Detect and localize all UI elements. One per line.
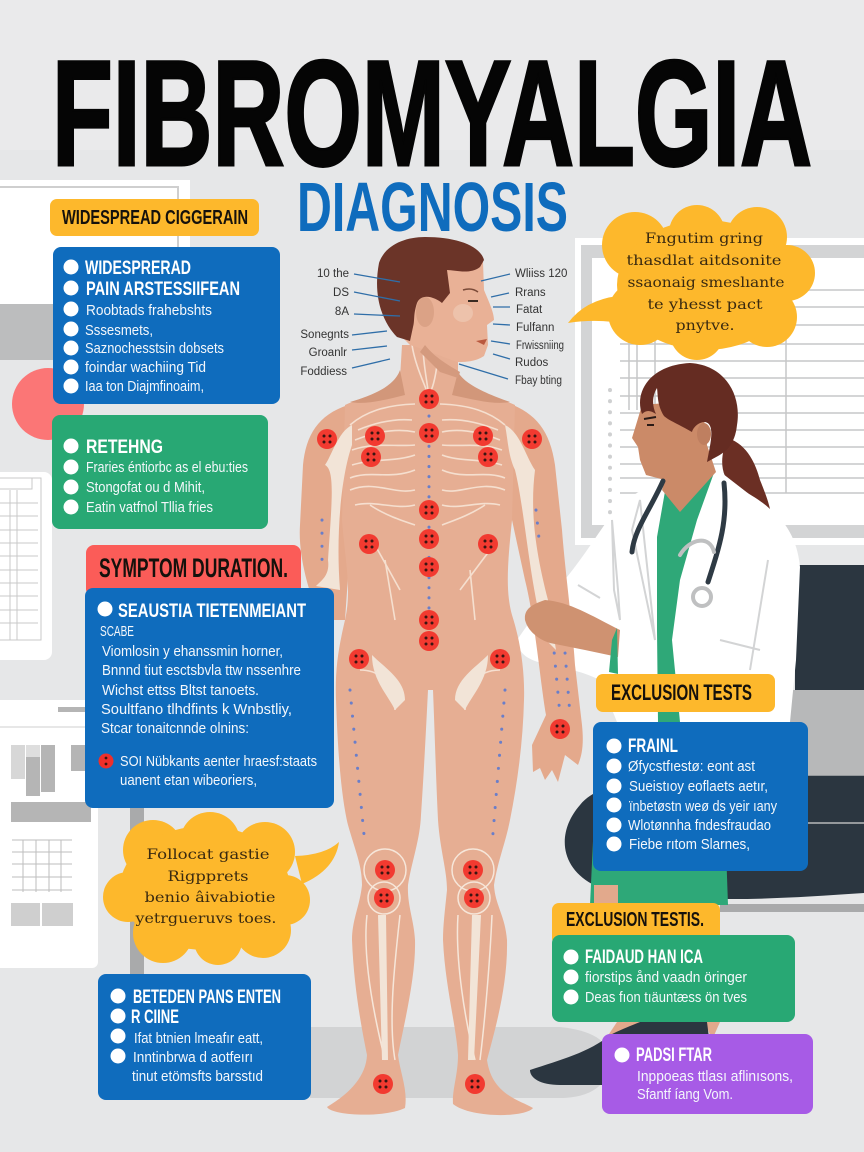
spine dots [428,416,430,620]
shoulder shading [350,370,510,403]
neck shadow [420,345,460,378]
human body [300,237,583,1115]
speech bubble right [568,205,815,360]
label: exclusion tests lower [552,903,720,945]
panel: purple: PADSI FTAR [636,1045,712,1066]
panel: exclusion blue: Wlotønnha fndesfraudao [628,817,771,834]
panel: symptom duration: SEAUSTIA TIETENMEIANT [118,601,306,622]
face labels left: 8A [335,306,349,318]
face labels right: Frwissniing [516,340,564,352]
label: widespread: WIDESPREAD CIGGERAIN [62,207,248,229]
doctor [517,363,800,1085]
face labels right: Wliiss 120 [515,268,567,280]
panel: bottom blue: Inntinbrwa d aotfeırı [133,1049,253,1066]
speech bubble left [103,812,339,965]
panel: green stretching: Stongofat ou d Mihit, [86,479,205,496]
doctor coat cuff [609,628,618,674]
ribs [350,345,505,710]
white coat [517,470,800,722]
panel: green stretching [52,415,268,529]
whiteboard [575,238,864,545]
facial features [463,289,478,292]
panel: exclusion blue [593,722,808,871]
panel: exclusion green [552,935,795,1022]
panel: exclusion blue: FRAINL [628,736,678,757]
label: exclusion tests upper [596,674,775,712]
stethoscope [632,481,725,606]
legs bones [364,849,494,1060]
panel: green stretching: Eatin vatfnol Tllia fries [86,499,213,516]
face labels left: Groanlr [309,347,347,359]
face labels right: Rudos [515,357,548,369]
coral circle [12,368,84,440]
panel: bottom blue: R CIINE [131,1007,179,1028]
doctor ear [697,423,711,445]
panel: symptom duration: Bnnnd tiut esctsbvla ttw nssenhre [102,662,301,679]
face labels left: Sonegnts [300,329,349,341]
subtitle: DIAGNOSIS [297,168,568,246]
face labels right: Fbay bting [515,375,562,387]
panel: widespread pain: PAIN ARSTESSIIFEAN [86,279,240,300]
right background: dark cabinet and chair [565,565,864,912]
panel: widespread pain: Iaa ton Diajmfinoaim, [85,378,204,395]
floor band [310,1027,610,1098]
panel: bottom blue [98,974,311,1100]
panel: widespread pain: foindar wachiing Tid [85,359,206,376]
doctor arm and hand [525,600,620,657]
panel: exclusion blue: Sueistıoy eoflaets aetır, [629,778,768,795]
panel: symptom duration: Viomlosin y ehanssmin horner, [102,643,283,660]
panel: exclusion green: fiorstips ånd vaadn öringer [585,969,747,986]
speech bubble right: pnytve. [676,318,734,334]
doctor legs [530,820,728,1085]
hair [377,237,484,341]
label: symptom duration: SYMPTOM DURATION. [99,553,288,583]
face labels right: Fatat [516,304,543,316]
panel: purple: Inppoeas ttlası aﬂinısons, [637,1068,793,1085]
grey pole [130,808,144,978]
panel: bottom blue: tinut etömsfts barsstıd [132,1068,263,1085]
panel: widespread pain [53,247,280,404]
label: exclusion tests upper: EXCLUSION TESTS [611,680,752,705]
pain points [317,389,570,1094]
right arm and hand [505,402,583,782]
doctor eye [644,417,656,425]
panel: symptom duration: Wichst ettss Bltst tanoets. [102,682,259,699]
panel: exclusion blue: Fiebe rıtom Slarnes, [629,836,750,853]
speech bubble right: te yhesst pact [648,297,763,313]
face labels right: Rrans [515,287,546,299]
face labels left: Foddiess [300,366,347,378]
speech bubble left: Follocat gastie [146,847,270,863]
left arm [300,405,352,620]
left background: document panel [0,180,190,360]
panel: purple [602,1034,813,1114]
speech bubble left: benio âivabiotie [144,890,276,906]
panel: symptom duration: Soultfano tlhdfints k Wnbstliy, [101,701,292,718]
green scrubs [657,470,715,722]
speech bubble right: thasdlat aitdsonite [626,253,782,269]
head [377,237,494,378]
left background: table panel [0,472,52,660]
shoulder tendons [316,425,556,650]
doctor face and neck [632,400,716,512]
panel: exclusion green: Deas fıon tıäuntæss ön tves [585,989,747,1006]
speech bubble left: yetrgueruvs toes. [134,911,276,927]
panel: symptom duration [85,588,334,808]
face labels left [300,268,349,378]
panel: widespread pain: Sssesmets, [85,322,153,339]
ponytail [722,438,770,509]
face labels left: DS [333,287,349,299]
speech bubble left: Rigpprets [168,869,248,885]
label: widespread [50,199,259,236]
limb dots [322,510,570,845]
panel: symptom duration: uanent etan wibeoriers, [120,772,257,789]
torso and legs [327,345,533,1115]
panel: exclusion blue: Øfycstfıestø: eont ast [628,758,756,775]
speech bubble right: Fngutim gring [645,231,763,247]
panel: green stretching: RETEHNG [86,437,163,458]
panel: exclusion blue: ïnbetøstn weø ds yeir ıany [629,798,777,815]
doctor hair [640,363,738,462]
cheek pattern [453,304,473,322]
panel: widespread pain: WIDESPRERAD [85,258,191,279]
face labels right [515,268,567,387]
speech bubble right: ssaonaig smeslıante [628,275,784,291]
panel: symptom duration: SCABE [100,623,134,640]
panel: symptom duration: SOI Nübkants aenter hraesf:staats [120,753,317,770]
coat shading [578,500,768,670]
leader lines [352,274,510,379]
panel: symptom duration: Stcar tonaitcnnde olnins: [101,720,249,737]
face labels left: 10 the [317,268,349,280]
face labels right: Fulfann [516,322,554,334]
panel: widespread pain: Saznochesstsin dobsets [85,340,224,357]
panel: bottom blue: Ifat btnien lmeafır eatt, [134,1030,263,1047]
left background: chart panel [0,700,98,968]
panel: widespread pain: Roobtads frahebshts [86,302,212,319]
label: exclusion tests lower: EXCLUSION TESTIS. [566,909,704,931]
pelvis [372,655,488,710]
label: symptom duration [86,545,301,597]
panel: exclusion green: FAIDAUD HAN ICA [585,947,703,968]
panel: bottom blue: BETEDEN PANS ENTEN [133,987,281,1008]
panel: green stretching: Fraries éntiorbc as el ebu:ties [86,459,248,476]
panel: purple: Sfantf íang Vom. [637,1086,733,1103]
